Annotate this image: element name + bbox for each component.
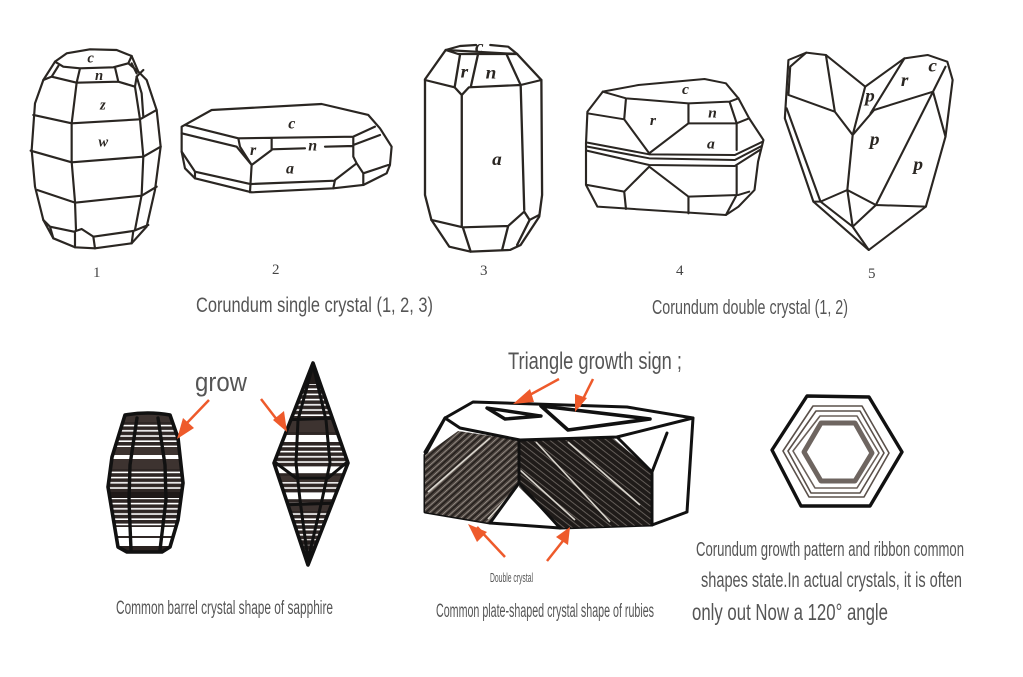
letters on crystal 5 bbox=[863, 56, 937, 175]
crystal 2: flat plate bbox=[182, 104, 392, 192]
letters on crystal 1: c bbox=[87, 51, 94, 67]
label: grow: grow bbox=[195, 367, 247, 397]
crystal 4: twin crystal bbox=[586, 79, 763, 215]
caption: single crystal: Corundum single crystal (1, 2, 3) bbox=[196, 294, 433, 317]
figure numbers: 2 bbox=[272, 262, 280, 278]
letters on crystal 1 bbox=[87, 51, 108, 151]
letters on crystal 4 bbox=[650, 81, 717, 152]
label: triangle growth sign: Triangle growth sign ; bbox=[508, 348, 682, 375]
crystal 5: heart twin bbox=[785, 53, 953, 250]
letters on crystal 4: n bbox=[708, 105, 717, 121]
letters on crystal 2: a bbox=[286, 160, 294, 177]
caption: growth pattern: only out Now a 120° angle bbox=[692, 599, 888, 625]
figure numbers: 3 bbox=[480, 263, 488, 279]
letters on crystal 5: p bbox=[868, 130, 879, 150]
caption: growth pattern bbox=[692, 539, 964, 625]
caption: barrel shape: Common barrel crystal shape of sapphire bbox=[116, 598, 333, 619]
letters on crystal 1: w bbox=[98, 135, 108, 151]
figure numbers bbox=[93, 262, 876, 282]
letters on crystal 3: a bbox=[492, 150, 502, 170]
letters on crystal 5: r bbox=[901, 71, 909, 91]
crystal 1: barrel bbox=[31, 49, 161, 248]
figure numbers: 5 bbox=[868, 266, 876, 282]
label: double crystal: Double crystal bbox=[490, 570, 533, 585]
letters on crystal 3: r bbox=[461, 62, 469, 82]
letters on crystal 1: z bbox=[99, 97, 106, 113]
letters on crystal 5: p bbox=[863, 86, 875, 106]
bipyramid outline bbox=[274, 363, 348, 565]
arrows: triangle and twin bbox=[468, 379, 593, 561]
figure numbers: 4 bbox=[676, 263, 684, 279]
letters on crystal 4: c bbox=[682, 81, 689, 98]
letters on crystal 2: c bbox=[288, 115, 295, 132]
bipyramid sapphire crystal bbox=[270, 360, 355, 570]
growth triangles bbox=[487, 408, 541, 419]
letters on crystal 5: p bbox=[911, 155, 923, 175]
caption: double crystal: Corundum double crystal (1, 2) bbox=[652, 297, 848, 319]
barrel outline bbox=[108, 413, 183, 552]
letters on crystal 2: n bbox=[308, 138, 317, 155]
figure numbers: 1 bbox=[93, 265, 100, 281]
letters on crystal 3 bbox=[461, 37, 502, 170]
letters on crystal 4: r bbox=[650, 112, 657, 129]
letters on crystal 4: a bbox=[707, 136, 715, 152]
arrows: grow bbox=[177, 399, 287, 439]
caption: plate shape: Common plate-shaped crystal shape of rubies bbox=[436, 601, 654, 622]
striped right face bbox=[519, 438, 652, 528]
ruby plate crystal bbox=[425, 402, 693, 528]
letters on crystal 1: n bbox=[95, 68, 103, 84]
letters on crystal 2: r bbox=[250, 142, 257, 159]
hexagon growth zoning bbox=[772, 396, 902, 506]
letters on crystal 2 bbox=[250, 115, 317, 177]
letters on crystal 3: n bbox=[486, 63, 496, 83]
striped left face bbox=[425, 431, 519, 523]
letters on crystal 5: c bbox=[928, 56, 937, 76]
crystal 3: prism bbox=[425, 37, 542, 252]
letters on crystal 3: c bbox=[475, 37, 484, 57]
barrel sapphire crystal bbox=[106, 411, 185, 554]
